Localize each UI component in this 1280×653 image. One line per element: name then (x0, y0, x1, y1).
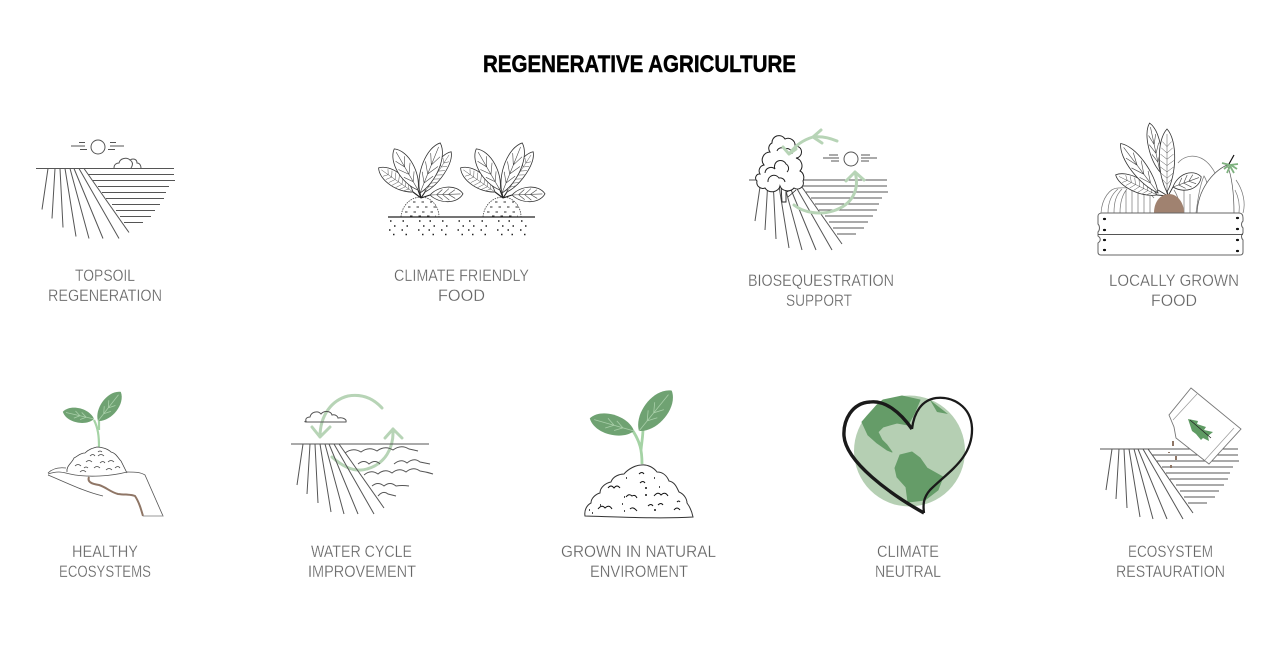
panel: climate neutral (844, 396, 972, 581)
label: water cycle improvement: IMPROVEMENT (308, 563, 416, 581)
label: climate neutral: NEUTRAL (875, 563, 941, 581)
label: biosequestration support (748, 272, 894, 310)
label: healthy ecosystems: HEALTHY (72, 543, 138, 561)
icon: vegetables behind the crate (1101, 156, 1244, 213)
label: grown in natural enviroment (561, 543, 716, 581)
label: locally grown food (1109, 272, 1239, 310)
label: climate friendly food: FOOD (438, 287, 485, 305)
icon: brown root (1154, 194, 1184, 213)
icon: earth with heart outline (844, 396, 972, 513)
label: ecosystem restauration: RESTAURATION (1116, 563, 1225, 581)
label: climate friendly food: CLIMATE FRIENDLY (394, 267, 529, 285)
label: topsoil regeneration: TOPSOIL (75, 267, 135, 285)
label: ecosystem restauration: ECOSYSTEM (1128, 543, 1213, 561)
panel: ecosystem restauration (1100, 388, 1241, 581)
label: locally grown food: LOCALLY GROWN (1109, 272, 1239, 290)
panel: biosequestration support (748, 130, 894, 310)
icon: root vegetables in soil (374, 140, 545, 234)
label: locally grown food: FOOD (1151, 292, 1197, 310)
label: water cycle improvement: WATER CYCLE (311, 543, 412, 561)
icon: tree, field and carbon cycle (749, 130, 888, 250)
panel: climate friendly food (374, 140, 545, 305)
label: topsoil regeneration (48, 267, 162, 305)
icon: leaves (1113, 122, 1204, 201)
icon: field, waves and water cycle (291, 395, 433, 514)
label: topsoil regeneration: REGENERATION (48, 287, 162, 305)
label: ecosystem restauration (1116, 543, 1225, 581)
label: biosequestration support: SUPPORT (786, 292, 852, 310)
panel: topsoil regeneration (36, 140, 175, 305)
label: grown in natural enviroment: GROWN IN NATURAL (561, 543, 716, 561)
label: grown in natural enviroment: ENVIROMENT (590, 563, 688, 581)
panel: healthy ecosystems (48, 387, 163, 581)
icon: hand holding sprout (48, 387, 163, 516)
title: REGENERATIVE AGRICULTURE (483, 51, 796, 78)
panel: water cycle improvement (291, 395, 433, 581)
label: healthy ecosystems (59, 543, 151, 581)
label: climate friendly food (394, 267, 529, 305)
icon: seed bag (1169, 388, 1241, 464)
icon: sprout on soil mound (585, 383, 693, 518)
icon: tree (756, 136, 804, 202)
icon: green star top (1222, 155, 1238, 173)
label: healthy ecosystems: ECOSYSTEMS (59, 563, 151, 581)
icon: falling seeds (1169, 441, 1176, 468)
label: climate neutral (875, 543, 941, 581)
panel: grown in natural environment (561, 383, 716, 581)
icon: crate of vegetables (1098, 122, 1244, 255)
label: climate neutral: CLIMATE (877, 543, 939, 561)
label: water cycle improvement (308, 543, 416, 581)
panel: locally grown food (1098, 122, 1244, 310)
icon: seed bag over field (1100, 388, 1241, 519)
label: biosequestration support: BIOSEQUESTRATION (748, 272, 894, 290)
icon: field with sun and cloud (36, 140, 175, 238)
